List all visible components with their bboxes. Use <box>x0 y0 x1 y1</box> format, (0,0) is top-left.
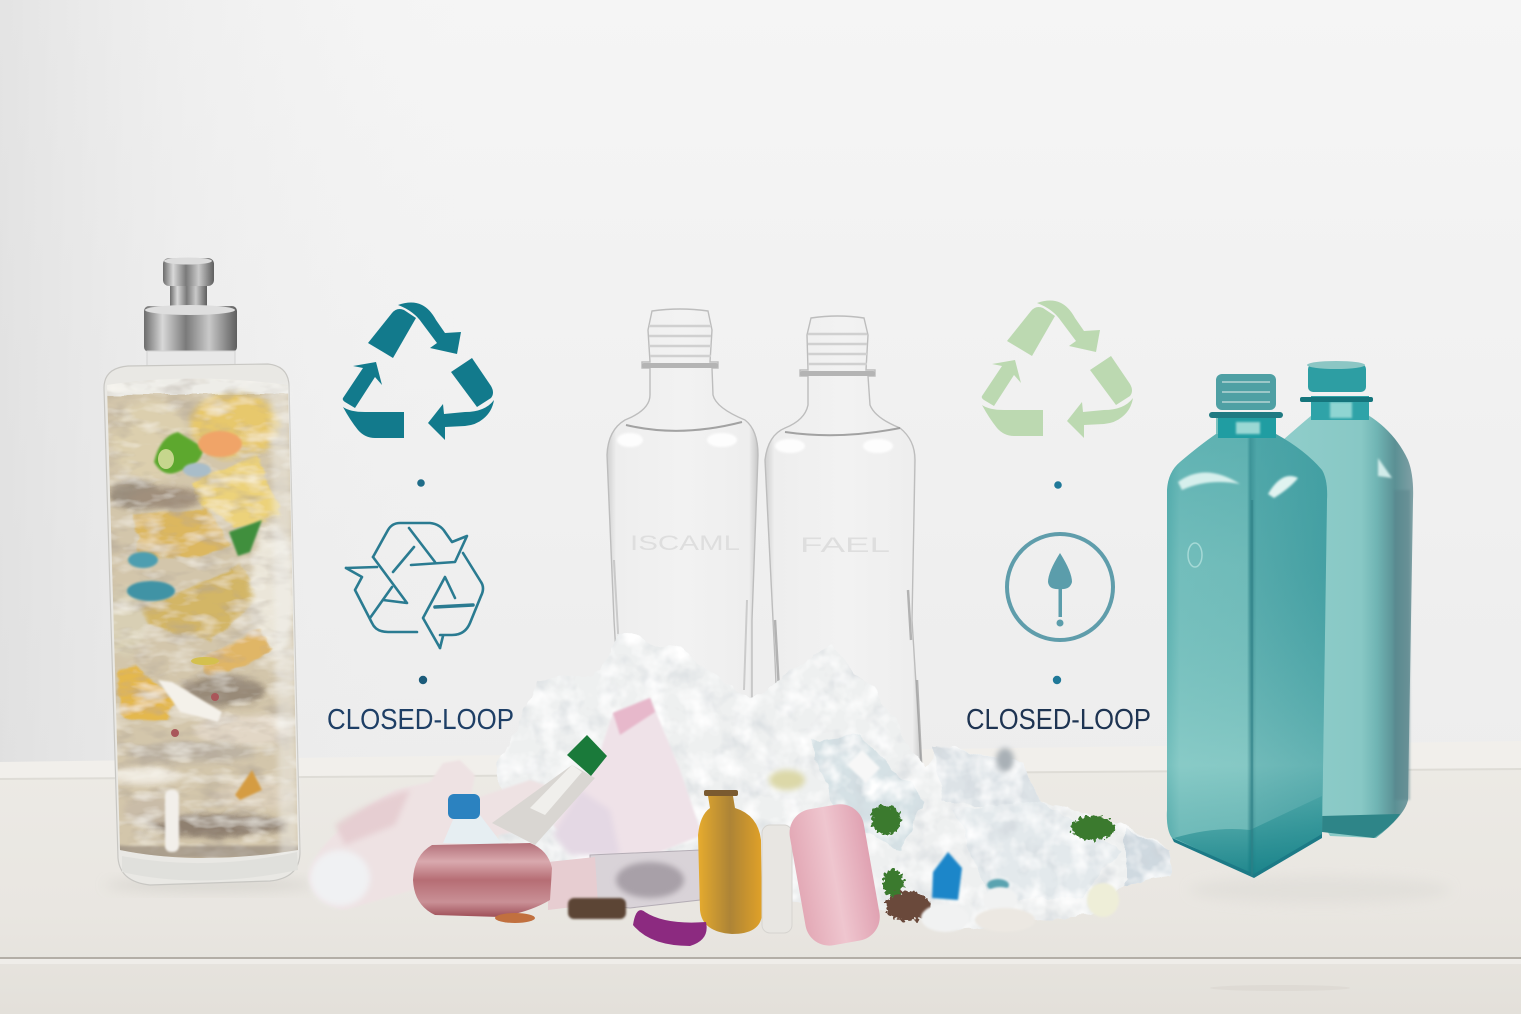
bottle: back teal bottle <box>1283 361 1413 838</box>
dot <box>1053 676 1061 684</box>
bottle with green cap <box>492 735 607 845</box>
label: closed-loop right: CLOSED-LOOP <box>966 704 1151 736</box>
blue plastic chip <box>932 852 962 900</box>
pink plastic bag <box>553 698 702 860</box>
waste fill <box>107 378 298 858</box>
icon: outlined recycling symbol <box>346 523 483 648</box>
bottle: glass jar filled with shredded waste <box>104 258 300 886</box>
icon: teal recycling arrows <box>343 302 494 440</box>
wine-coloured bottle on its side <box>413 843 700 923</box>
rose plastic cylinder <box>786 800 884 949</box>
small clear fragments <box>921 883 1119 932</box>
purple plastic fragment <box>633 910 707 946</box>
dot <box>417 479 425 487</box>
label: closed-loop left: CLOSED-LOOP <box>327 704 514 736</box>
dried flower <box>886 891 930 921</box>
bottle: clear bottle left <box>607 309 758 720</box>
wooden table <box>0 741 1521 1014</box>
dot <box>1054 481 1062 489</box>
pile of crushed plastic <box>308 635 1172 949</box>
icon: metal cap <box>144 258 237 352</box>
embossed bottle mark: FAEL <box>800 534 890 557</box>
cellophane mass <box>500 635 1172 930</box>
icon: circled seedling marker <box>1007 534 1113 640</box>
background wall <box>0 0 1521 770</box>
bottle: front teal bottle <box>1167 374 1327 878</box>
dot <box>419 676 427 684</box>
icon: green fragment <box>154 432 204 474</box>
clear cup behind <box>762 825 792 933</box>
yellow tie on film <box>769 770 805 790</box>
icon: green recycling arrows <box>982 300 1133 438</box>
bottle: clear bottle right <box>765 316 922 780</box>
bottle with blue cap <box>443 794 503 845</box>
teal spot <box>987 879 1009 891</box>
pale crushed bottle <box>308 760 560 910</box>
amber bottle <box>698 790 762 934</box>
plant sprigs <box>871 805 1115 896</box>
embossed bottle mark: ISCAML <box>630 532 740 555</box>
